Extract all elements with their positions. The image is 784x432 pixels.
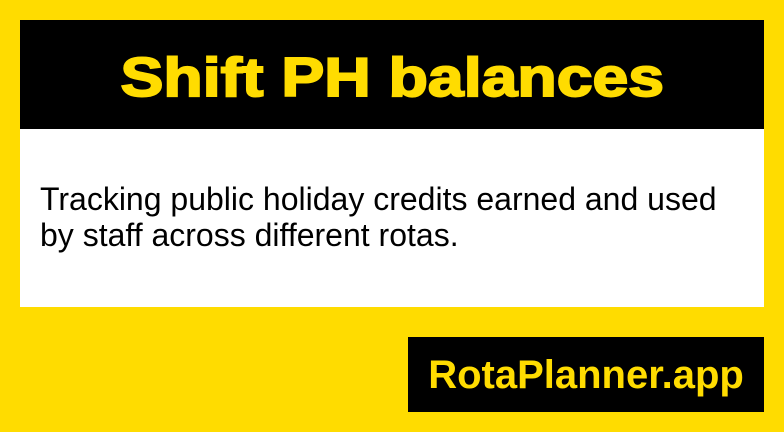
title banner [20, 20, 764, 129]
brand badge [408, 337, 764, 412]
description text: Tracking public holiday credits earned and used [40, 181, 717, 217]
title banner: Shift PH balances [120, 46, 664, 108]
brand badge: RotaPlanner.app [428, 353, 744, 397]
description panel [20, 129, 764, 307]
description text: by staff across different rotas. [40, 217, 459, 253]
description text [40, 181, 717, 253]
